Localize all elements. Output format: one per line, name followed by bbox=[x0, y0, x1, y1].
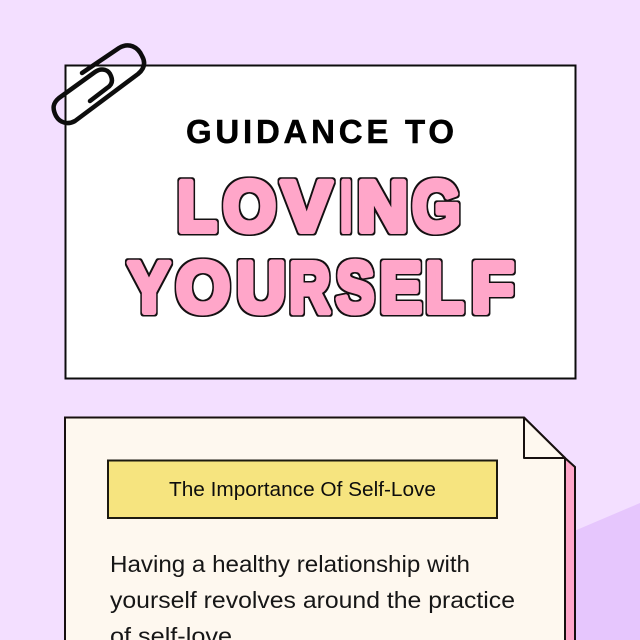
panel: importance of self-love note bbox=[65, 418, 575, 640]
title: loving yourself: U bbox=[237, 249, 286, 328]
title: loving yourself: O bbox=[176, 249, 230, 328]
title: loving yourself: V bbox=[282, 168, 332, 247]
title: loving yourself: F bbox=[471, 249, 514, 328]
section heading: The Importance Of Self-Love bbox=[169, 479, 436, 501]
title: loving yourself: N bbox=[357, 168, 408, 247]
title: loving yourself: O bbox=[223, 168, 276, 247]
title: loving yourself: G bbox=[412, 168, 460, 247]
body text: Having a healthy relationship with bbox=[110, 551, 470, 577]
section heading bbox=[108, 460, 497, 518]
body text bbox=[110, 551, 515, 640]
title: loving yourself: R bbox=[289, 249, 330, 328]
title card bbox=[66, 66, 576, 378]
body text: yourself revolves around the practice bbox=[110, 587, 515, 613]
title: loving yourself: Y bbox=[128, 249, 170, 328]
heading: guidance to: GUIDANCE TO bbox=[186, 113, 454, 150]
page fold bbox=[524, 418, 565, 458]
background shape: lower right bbox=[340, 503, 640, 640]
title: loving yourself bbox=[128, 168, 514, 328]
icon: paperclip bbox=[54, 45, 144, 123]
title: loving yourself: I bbox=[340, 168, 352, 247]
title: loving yourself: S bbox=[336, 249, 374, 328]
title: loving yourself: L bbox=[425, 249, 464, 328]
title: loving yourself: L bbox=[177, 168, 217, 247]
pink page edge bbox=[565, 458, 575, 640]
paper sheet bbox=[65, 418, 565, 640]
title: loving yourself: E bbox=[380, 249, 422, 328]
